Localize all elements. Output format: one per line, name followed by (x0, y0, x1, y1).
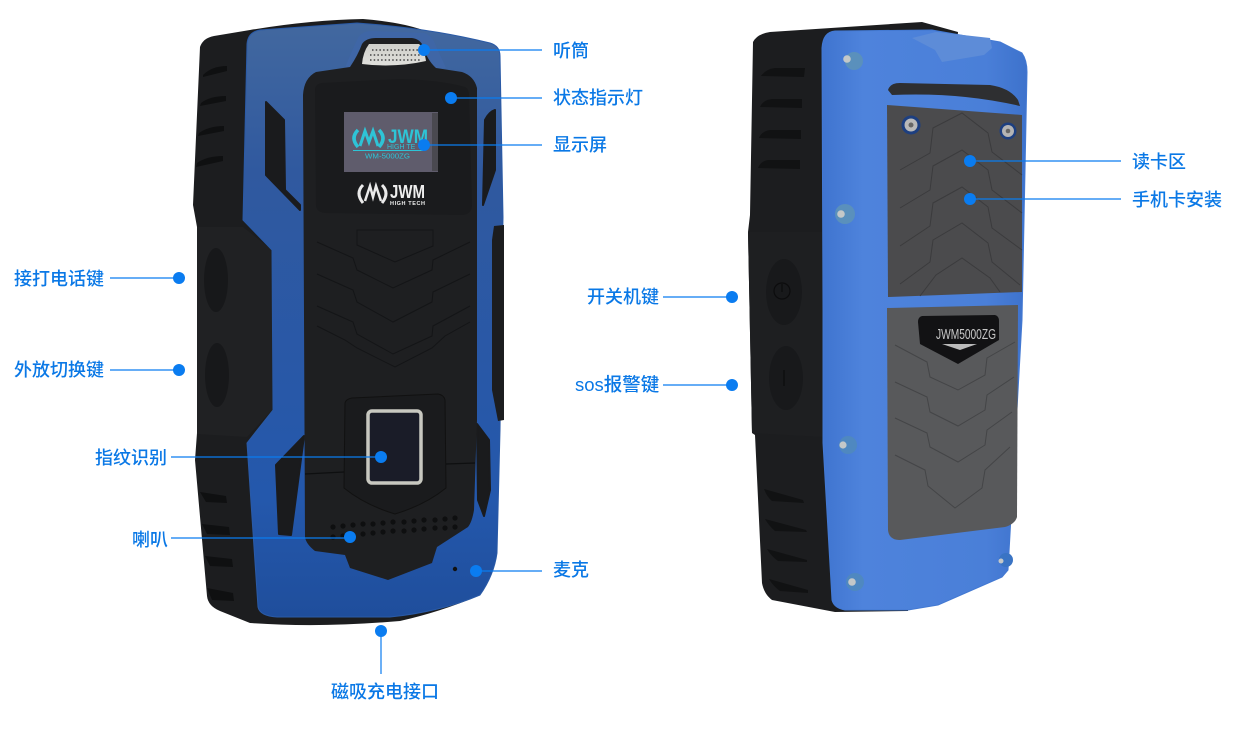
label: 指纹识别: 指纹识别 (95, 448, 167, 468)
front blue side slots (266, 102, 495, 535)
display logo: JWM (388, 127, 428, 148)
front JWM logo: HIGH TECH (390, 201, 425, 207)
earpiece raised blue surround (345, 31, 446, 68)
back device (748, 22, 1027, 612)
front JWM logo: JWM (390, 182, 425, 202)
label: 听筒 (418, 41, 589, 61)
badge arrow (942, 344, 977, 350)
screws (902, 116, 1016, 140)
back side panel (748, 232, 823, 437)
back blue casing (822, 30, 1027, 610)
front device (193, 19, 504, 625)
front left grip notches (196, 66, 234, 601)
front body black shell (193, 19, 490, 625)
label: sos报警键 (575, 374, 738, 395)
label: 喇叭: 喇叭 (132, 530, 168, 550)
front JWM logo (359, 182, 425, 207)
label: 接打电话键: 接打电话键 (14, 269, 104, 289)
label: 磁吸充电接口 (331, 625, 439, 702)
label: 读卡区: 读卡区 (1132, 152, 1186, 172)
display logo (353, 127, 428, 160)
label: 显示屏: 显示屏 (553, 135, 607, 155)
fingerprint sensor (368, 411, 421, 483)
SIM cover chevrons (900, 113, 1022, 296)
battery cover chevrons (895, 342, 1015, 508)
display logo: HIGH TE (387, 144, 416, 151)
label: 开关机键: 开关机键 (587, 287, 659, 307)
model badge (918, 315, 999, 364)
fingerprint shield (344, 394, 446, 514)
front blue casing (243, 23, 503, 617)
earpiece grille (362, 44, 426, 65)
label: 喇叭 (132, 530, 356, 550)
label: 状态指示灯: 状态指示灯 (553, 88, 643, 108)
top clip detail (912, 32, 992, 62)
earpiece holes (370, 50, 421, 60)
body screws (835, 52, 1013, 591)
label: 听筒: 听筒 (553, 41, 589, 61)
label: 状态指示灯 (445, 88, 643, 108)
label: 读卡区 (964, 152, 1186, 172)
label: 外放切换键: 外放切换键 (14, 360, 104, 380)
back black shell (748, 22, 958, 612)
label: 指纹识别 (95, 448, 387, 468)
battery cover (887, 305, 1018, 540)
display screen (344, 112, 438, 172)
label: 外放切换键 (14, 360, 185, 380)
label: 磁吸充电接口: 磁吸充电接口 (331, 682, 439, 702)
label: sos报警键: sos报警键 (575, 374, 659, 395)
label: 麦克: 麦克 (553, 560, 589, 580)
plate seam lines (305, 463, 475, 474)
label: 手机卡安装: 手机卡安装 (1132, 190, 1222, 210)
speaker holes (330, 515, 458, 540)
model text: JWM5000ZG (936, 326, 996, 343)
back button marks (774, 283, 790, 386)
front side panel (197, 227, 272, 437)
front chevrons (317, 230, 470, 367)
label: 麦克 (470, 560, 589, 580)
front right side key (492, 225, 504, 421)
label: 手机卡安装 (964, 190, 1222, 210)
front display glass (315, 79, 472, 215)
microphone hole (453, 567, 457, 571)
rubber bar (888, 83, 1020, 106)
label: 接打电话键 (14, 269, 185, 289)
back left grip notches (758, 68, 808, 593)
back side buttons (766, 259, 803, 410)
label: 显示屏 (418, 135, 607, 155)
SIM cover (887, 105, 1022, 297)
display logo: WM-5000ZG (365, 154, 410, 160)
front black centre plate (303, 38, 477, 580)
label: 开关机键 (587, 287, 738, 307)
front side buttons (204, 248, 229, 407)
